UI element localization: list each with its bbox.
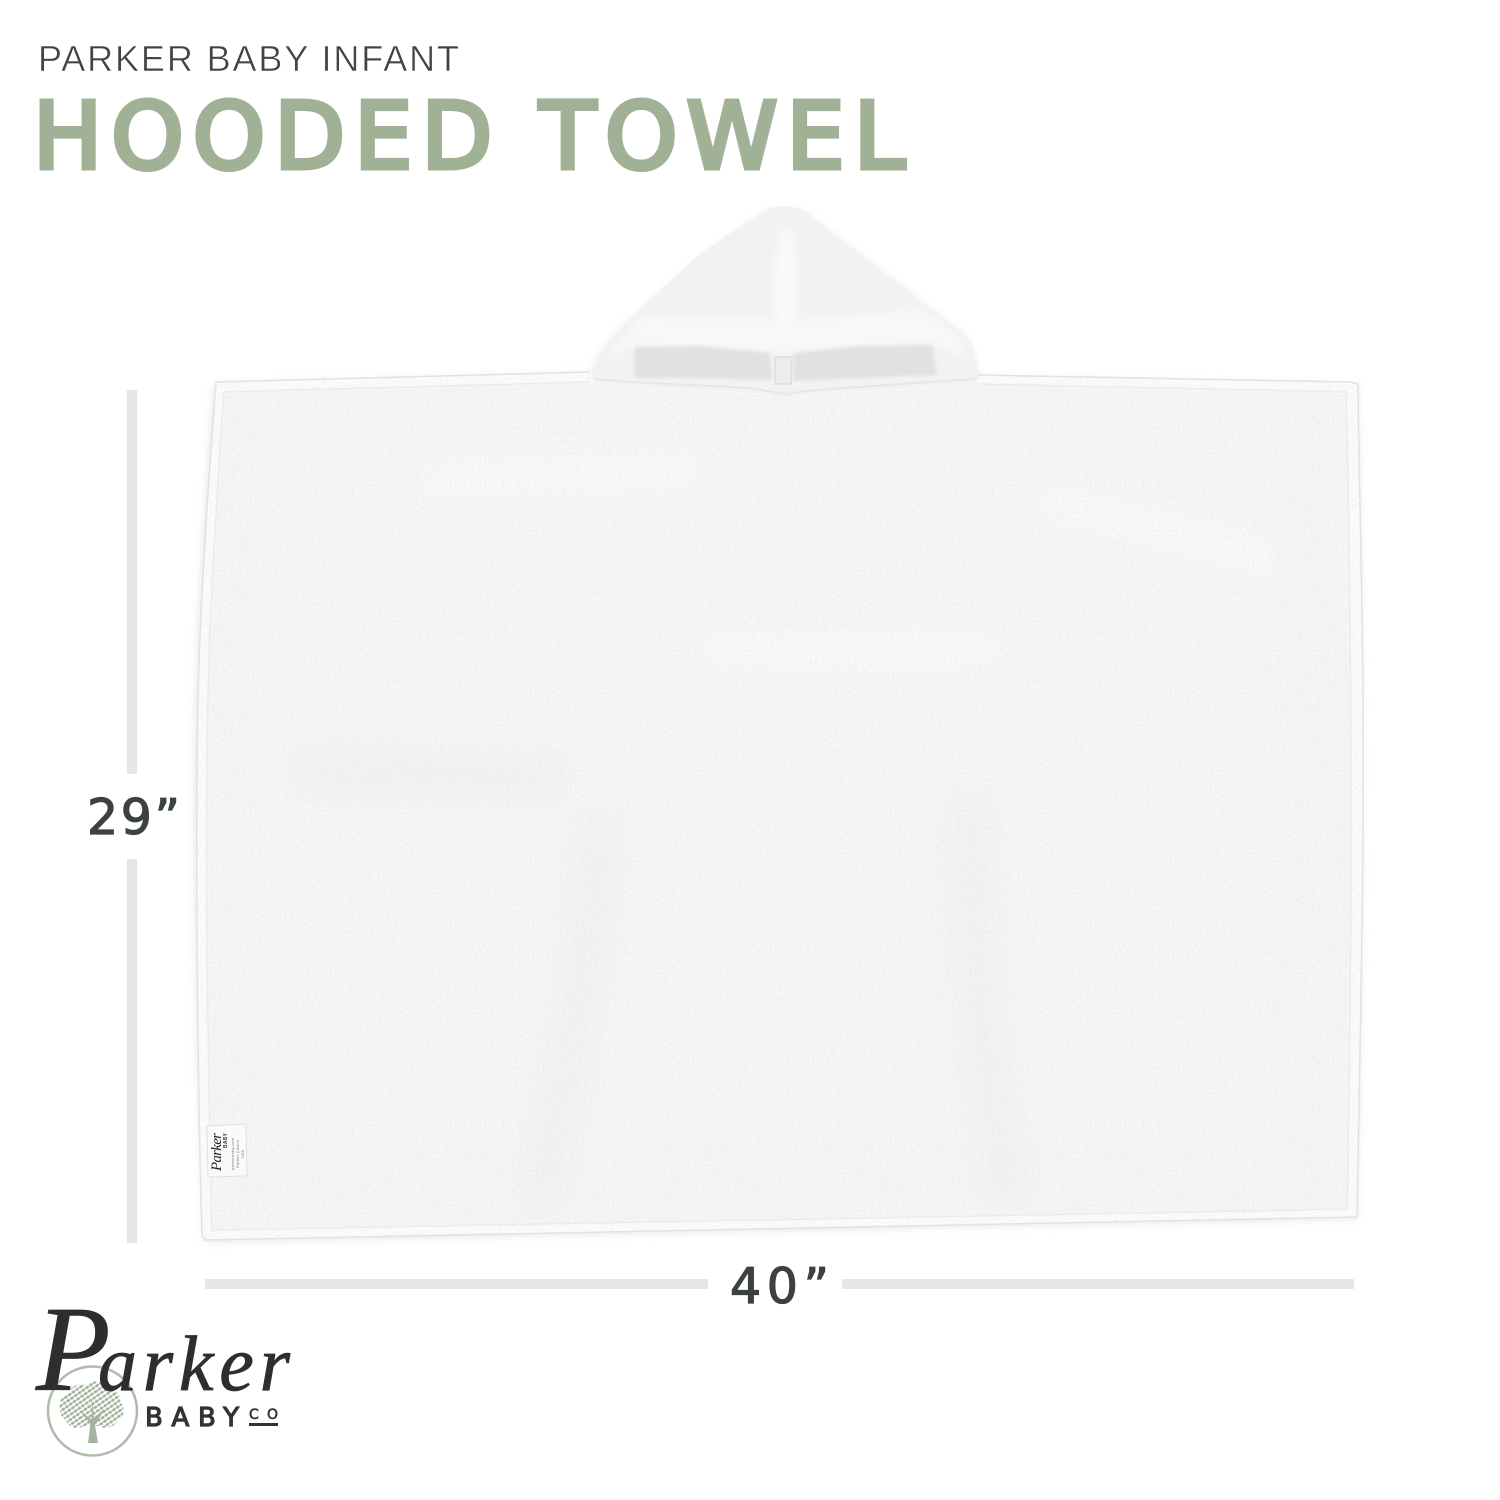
- height bar bottom: [127, 859, 137, 1243]
- hood shell: [592, 206, 978, 397]
- inner hood band right: [793, 345, 937, 381]
- label tag: [207, 1124, 247, 1177]
- towel body: [198, 364, 1362, 1239]
- hood brim highlight: [604, 310, 968, 362]
- title: HOODED TOWEL: [33, 83, 905, 190]
- hood centre loop: [775, 357, 792, 384]
- logo co underline: [249, 1423, 278, 1426]
- logo tree: [59, 1382, 124, 1443]
- tree canopy: [59, 1382, 124, 1428]
- height label: 29”: [87, 789, 180, 846]
- towel inner terry panel: [207, 382, 1351, 1230]
- towel fold shading: [300, 470, 1280, 1200]
- label brand text: Parker: [209, 1133, 225, 1172]
- terry texture: [198, 370, 1362, 1238]
- height dimension: [87, 390, 180, 1243]
- label origin: Parker Cotton: [235, 1140, 240, 1168]
- width bar right: [842, 1279, 1354, 1289]
- label details: parkerbaby.com: [230, 1137, 235, 1170]
- inner hood band left: [634, 346, 772, 380]
- logo tree circle: [48, 1366, 137, 1456]
- width bar left: [205, 1279, 708, 1289]
- logo wordmark: P: [35, 1282, 111, 1417]
- width dimension: [205, 1258, 1354, 1315]
- hood centre highlight: [774, 228, 798, 345]
- hood seam: [594, 379, 975, 394]
- logo wordmark: arker: [98, 1320, 291, 1407]
- label baby text: BABY: [223, 1132, 229, 1148]
- logo baby text: BABY: [145, 1403, 239, 1433]
- towel hem outline: [197, 372, 1363, 1240]
- logo co text: CO: [249, 1407, 278, 1423]
- label size: USA: [240, 1150, 245, 1158]
- subtitle: PARKER BABY INFANT: [38, 38, 459, 79]
- hood: [592, 206, 978, 397]
- brand logo: [35, 1282, 291, 1456]
- tree trunk: [80, 1398, 105, 1443]
- hooded towel illustration: [190, 200, 1370, 1250]
- height bar top: [127, 390, 137, 774]
- hem stitch line: [207, 382, 1351, 1230]
- towel drop shadow: [195, 210, 1361, 1242]
- width label: 40”: [730, 1258, 829, 1315]
- care label: [207, 1124, 247, 1177]
